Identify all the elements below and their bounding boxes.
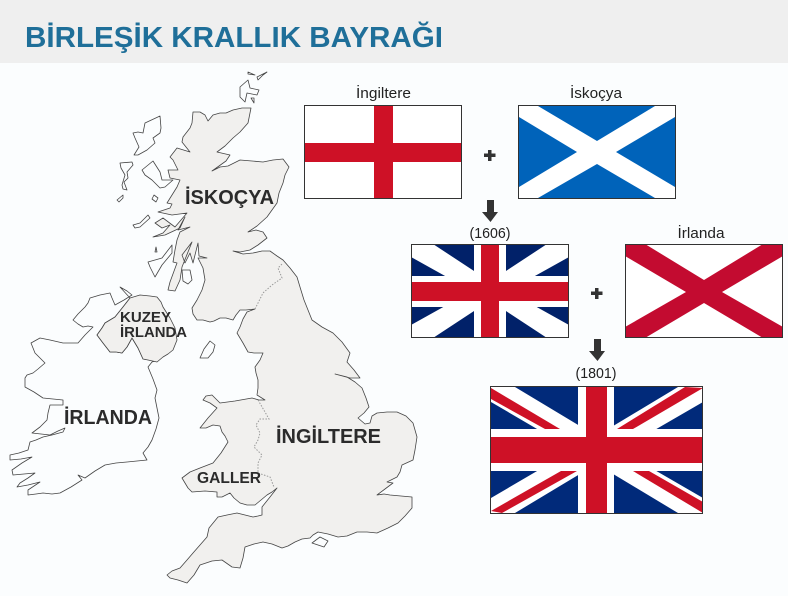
- map of the British Isles: [10, 72, 417, 583]
- plus sign: [484, 150, 496, 161]
- map: Scottish and other islands: [117, 72, 328, 547]
- map: Republic of Ireland: [10, 287, 159, 495]
- arrow down: [589, 339, 605, 361]
- plus sign: [591, 288, 602, 299]
- title bar: BİRLEŞİK KRALLIK BAYRAĞI: [25, 20, 443, 54]
- flag label: 1606: (1606): [470, 225, 511, 242]
- flag: 1801 Union Flag: [490, 386, 703, 514]
- label: İrlanda: İRLANDA: [64, 406, 152, 429]
- flag: Scotland: [518, 106, 676, 198]
- map: dotted borders: [254, 263, 283, 487]
- flag label: İrlanda: İrlanda: [678, 224, 725, 242]
- label: İskoçya: İSKOÇYA: [185, 186, 274, 209]
- flag label: İskoçya: İskoçya: [570, 84, 623, 102]
- flag label: İngiltere: İngiltere: [356, 84, 411, 102]
- flag label: 1801: (1801): [576, 365, 617, 382]
- flag: 1606 Union Flag: [411, 244, 569, 338]
- flag: St Patrick's saltire: [625, 244, 783, 338]
- map: Great Britain: [153, 108, 417, 583]
- flag: England: [304, 105, 462, 199]
- label: İngiltere: İNGİLTERE: [276, 425, 381, 448]
- label: Kuzey İrlanda: İRLANDA: [120, 324, 188, 341]
- label: Kuzey İrlanda: KUZEY: [120, 310, 171, 326]
- label: Galler: GALLER: [197, 470, 261, 487]
- title bar: [0, 0, 788, 63]
- label: Kuzey İrlanda: [120, 310, 188, 341]
- arrow down: [482, 200, 498, 222]
- map: Northern Ireland: [97, 295, 177, 362]
